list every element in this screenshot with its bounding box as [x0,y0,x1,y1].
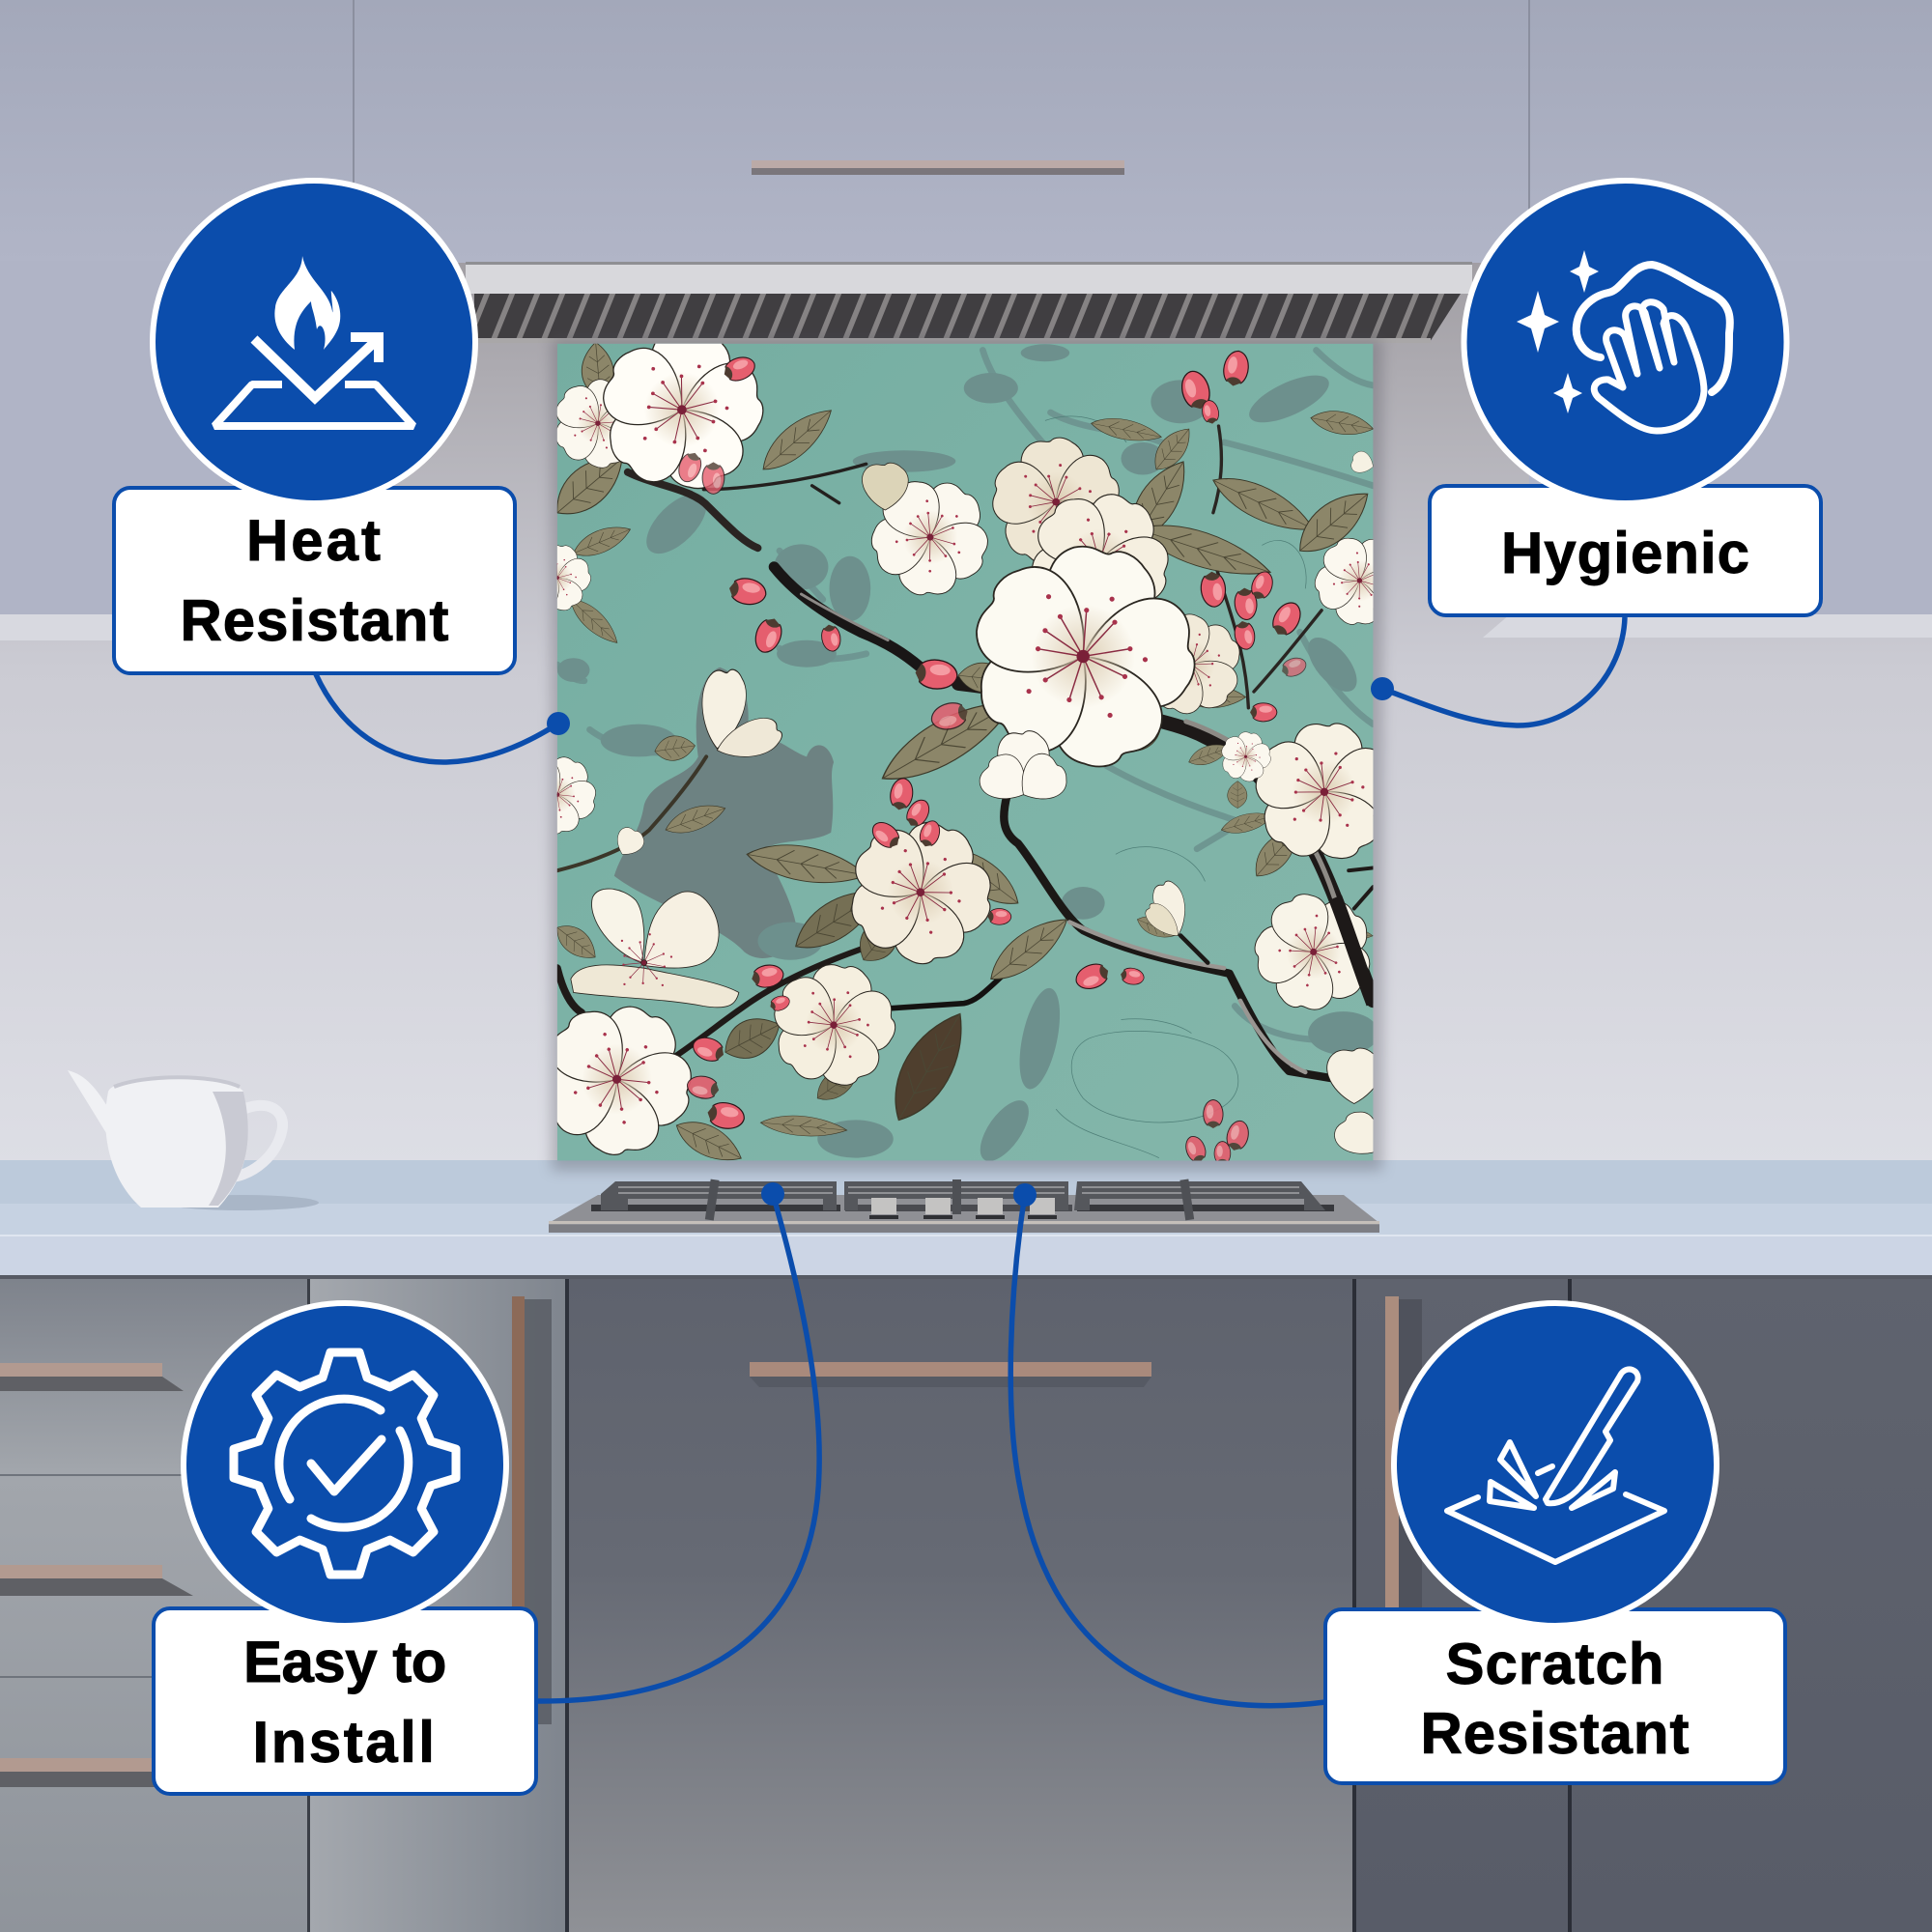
background shadows [557,344,1378,1169]
callout: hygienic [1430,181,1821,615]
branch over right blossom [1335,897,1373,1004]
upper cabinets [0,0,1932,640]
label text: Scratch [1445,1632,1665,1696]
lower cabinets [0,1275,1932,1932]
icon badge [1394,1303,1717,1626]
connector: easy to install [537,1194,819,1701]
label box [154,1608,536,1794]
cabinet handle [752,160,1124,175]
label text: Resistant [180,588,450,653]
label text: Resistant [1420,1701,1690,1766]
lower cabinet handles [0,1296,1422,1787]
icon: hand wiping with sparkles [1517,250,1730,431]
label text: Easy to [243,1630,446,1694]
label text: Hygienic [1501,521,1750,585]
leaves [544,341,1379,1171]
cooker hood [466,262,1472,343]
callout: heat resistant [114,181,515,673]
half-open blossoms [611,449,1390,1166]
icon badge [184,1303,506,1626]
floral splashback panel [556,344,1374,1161]
anchor dot: easy to install [761,1182,784,1206]
cooktop [549,1179,1379,1233]
icon badge [1464,181,1787,503]
panel shadow [552,338,1382,1171]
connector: scratch resistant [1010,1194,1325,1706]
callout: easy to install [154,1303,536,1794]
flowers [498,315,1426,1192]
label box [1325,1609,1785,1783]
label text: Heat [246,508,384,573]
wall [0,261,1932,1164]
connector: hygienic [1382,617,1625,725]
countertop [0,1160,1932,1275]
icon: knife scratching surface [1447,1369,1664,1562]
flower: two-petal blossom lower left [571,889,739,1008]
teapot [68,1070,319,1210]
anchor dot: heat resistant [547,712,570,735]
connector: heat resistant [316,674,558,762]
branches [557,426,1373,1079]
callout: scratch resistant [1325,1303,1785,1783]
icon: gear with check [234,1352,456,1575]
label box [114,488,515,673]
anchor dot: scratch resistant [1013,1183,1037,1207]
icon badge [153,181,475,503]
label box [1430,486,1821,615]
icon: flame over surface [214,256,413,426]
anchor dot: hygienic [1371,677,1394,700]
label text: Install [253,1710,437,1775]
buds [675,349,1309,1165]
